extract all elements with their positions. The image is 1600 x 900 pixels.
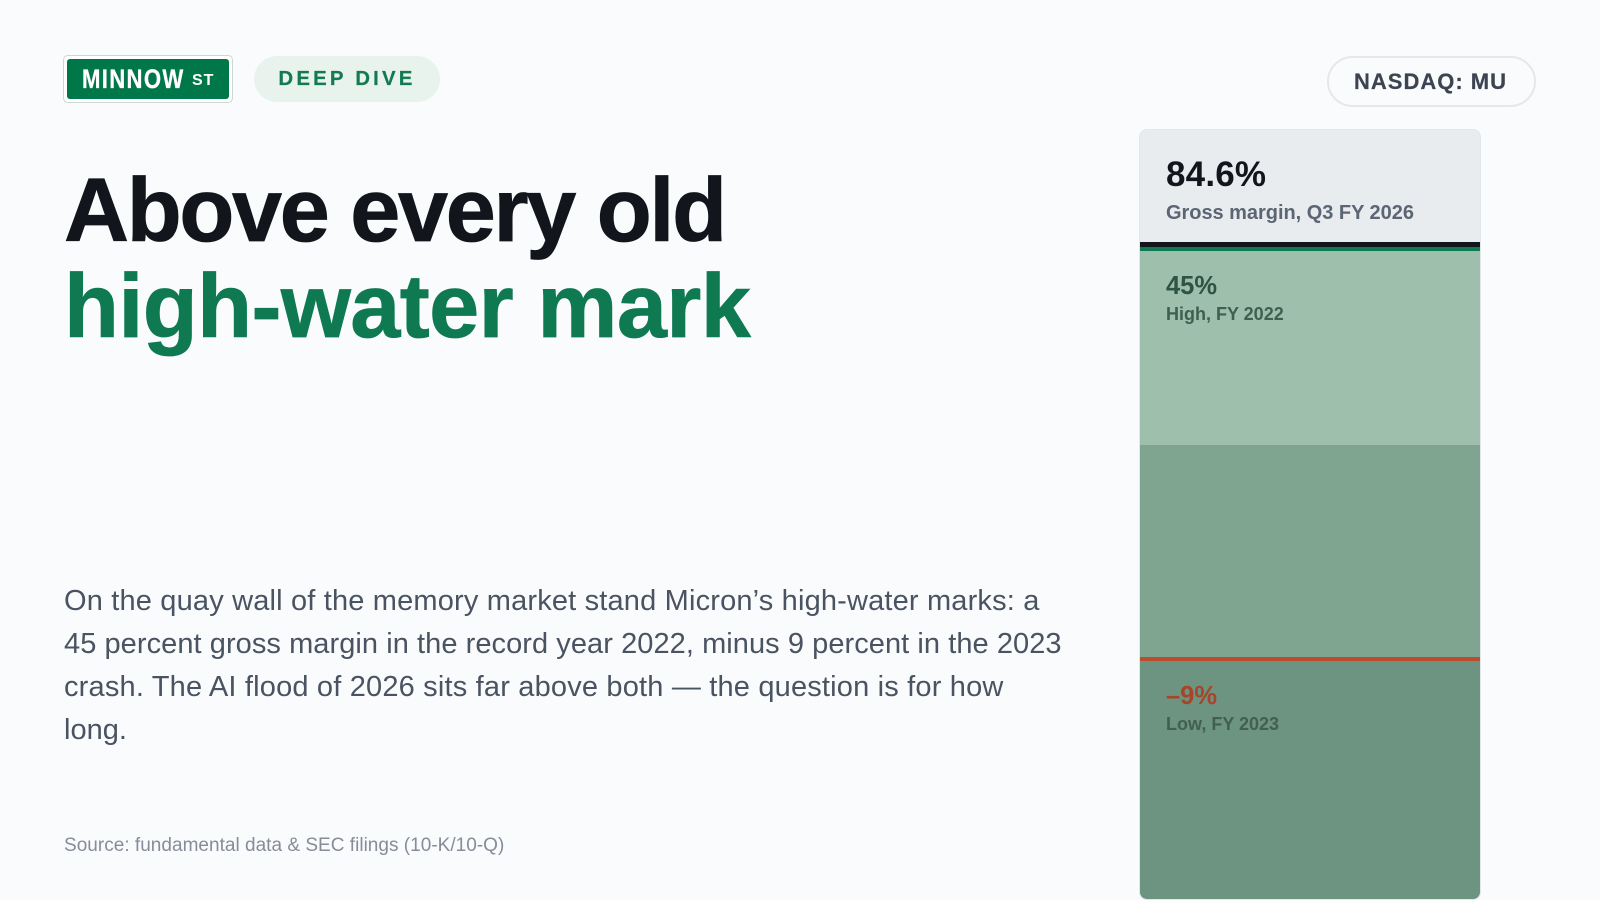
label: low: Low, FY 2023 <box>1166 714 1279 734</box>
marker: current level line <box>1140 242 1480 247</box>
panel: water level gauge <box>1139 129 1481 900</box>
title: Above every old <box>64 161 725 261</box>
marker: low level line <box>1140 657 1480 661</box>
marker: high level line <box>1140 247 1480 251</box>
value: 84.6%: 84.6% <box>1166 155 1266 194</box>
tag: Deep Dive: DEEP DIVE <box>278 68 416 90</box>
body text: long. <box>64 714 127 746</box>
body text: crash. The AI flood of 2026 sits far above both — the question is for how <box>64 671 1004 703</box>
label: gross margin: Gross margin, Q3 FY 2026 <box>1166 202 1414 224</box>
logo: Minnow St street sign: ST <box>192 72 214 89</box>
value: 45%: 45% <box>1166 272 1217 300</box>
band: high FY 2022 <box>1140 251 1480 445</box>
band: current gross margin <box>1140 130 1480 242</box>
logo: Minnow St street sign <box>63 55 233 103</box>
ticker pill <box>1327 56 1536 107</box>
band: middle water <box>1140 445 1480 657</box>
body text <box>64 585 1062 746</box>
logo: Minnow St street sign: MINNOW <box>82 64 185 94</box>
band: low FY 2023 <box>1140 661 1480 899</box>
ticker pill: NASDAQ: MU <box>1354 69 1507 94</box>
body text: On the quay wall of the memory market stand Micron’s high-water marks: a <box>64 585 1040 617</box>
label: high: High, FY 2022 <box>1166 304 1284 324</box>
value: -9%: –9% <box>1166 682 1217 710</box>
tag: Deep Dive <box>254 56 440 102</box>
title <box>64 161 752 357</box>
title: high-water mark <box>64 257 750 357</box>
body text: 45 percent gross margin in the record year 2022, minus 9 percent in the 2023 <box>64 628 1062 660</box>
source note: Source: fundamental data & SEC filings (10-K/10-Q) <box>64 835 504 856</box>
